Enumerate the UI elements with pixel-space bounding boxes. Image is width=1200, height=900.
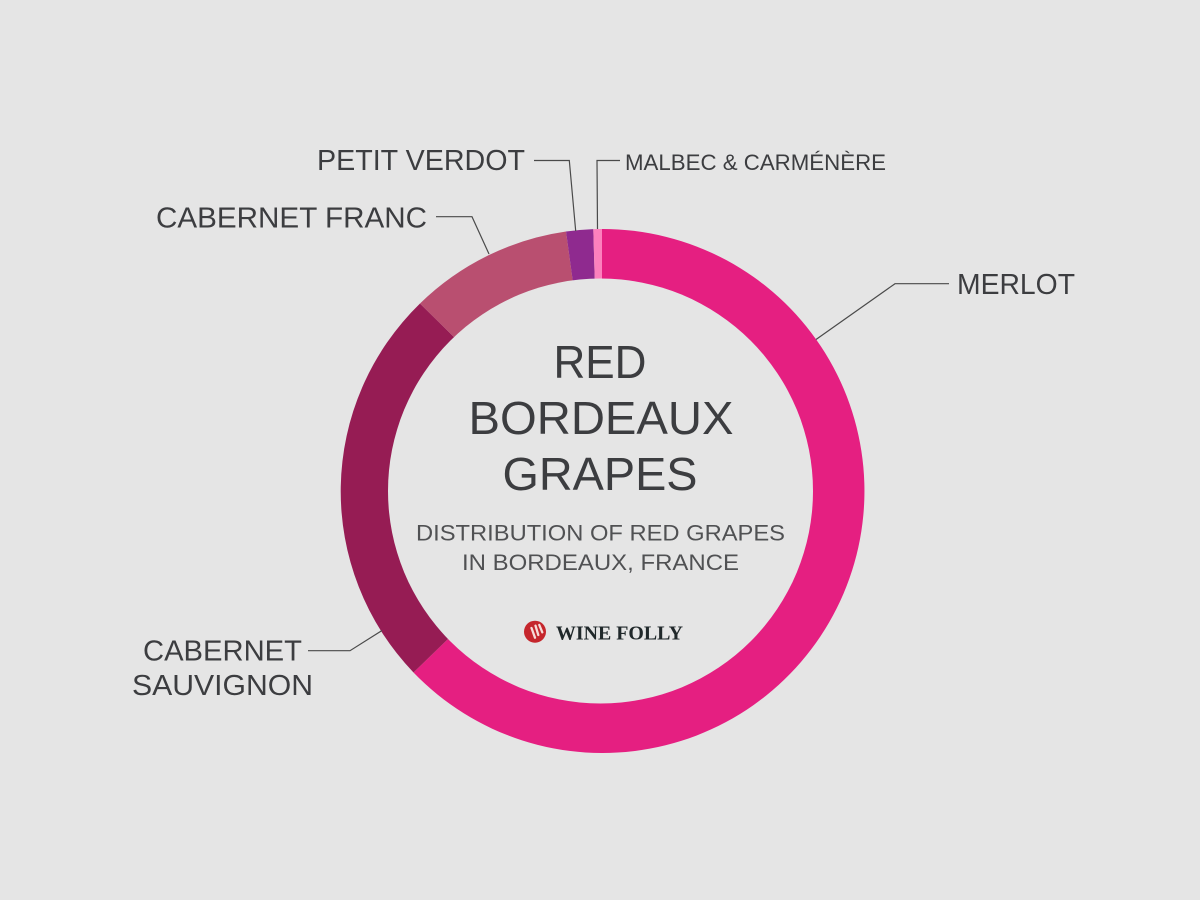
label: Cabernet Sauvignon: CABERNET	[143, 636, 302, 668]
label: Cabernet Sauvignon: SAUVIGNON	[132, 670, 313, 702]
segment: Petit Verdot	[566, 229, 601, 491]
leader line: Cabernet Franc	[436, 217, 489, 254]
leader line: Merlot	[816, 284, 949, 340]
title: GRAPES	[502, 448, 698, 500]
segment: Malbec and Carmenere	[593, 229, 602, 491]
leader line: Malbec and Carmenere	[597, 160, 620, 229]
donut chart	[341, 229, 864, 753]
subtitle: DISTRIBUTION OF RED GRAPES	[416, 520, 785, 546]
title: BORDEAUX	[468, 392, 734, 444]
leader line: Cabernet Sauvignon	[308, 630, 382, 651]
title: RED	[554, 336, 646, 388]
donut hole	[388, 278, 813, 704]
subtitle: IN BORDEAUX, FRANCE	[462, 550, 739, 575]
wordmark: WINE FOLLY	[556, 622, 683, 644]
icon: red circle with bottles	[524, 621, 546, 643]
label: Petit Verdot: PETIT VERDOT	[317, 145, 525, 177]
title	[468, 336, 734, 500]
label: Cabernet Sauvignon	[132, 636, 313, 702]
label: Malbec and Carmenere: MALBEC & CARMÉNÈRE	[625, 150, 886, 175]
label: Cabernet Franc: CABERNET FRANC	[156, 202, 427, 234]
segment: Merlot	[414, 229, 864, 753]
segment: Cabernet Sauvignon	[341, 304, 601, 672]
segment: Cabernet Franc	[420, 232, 601, 491]
label: Merlot: MERLOT	[957, 269, 1075, 301]
logo: Wine Folly	[524, 621, 683, 644]
leader line: Petit Verdot	[534, 160, 576, 231]
subtitle	[416, 520, 785, 575]
